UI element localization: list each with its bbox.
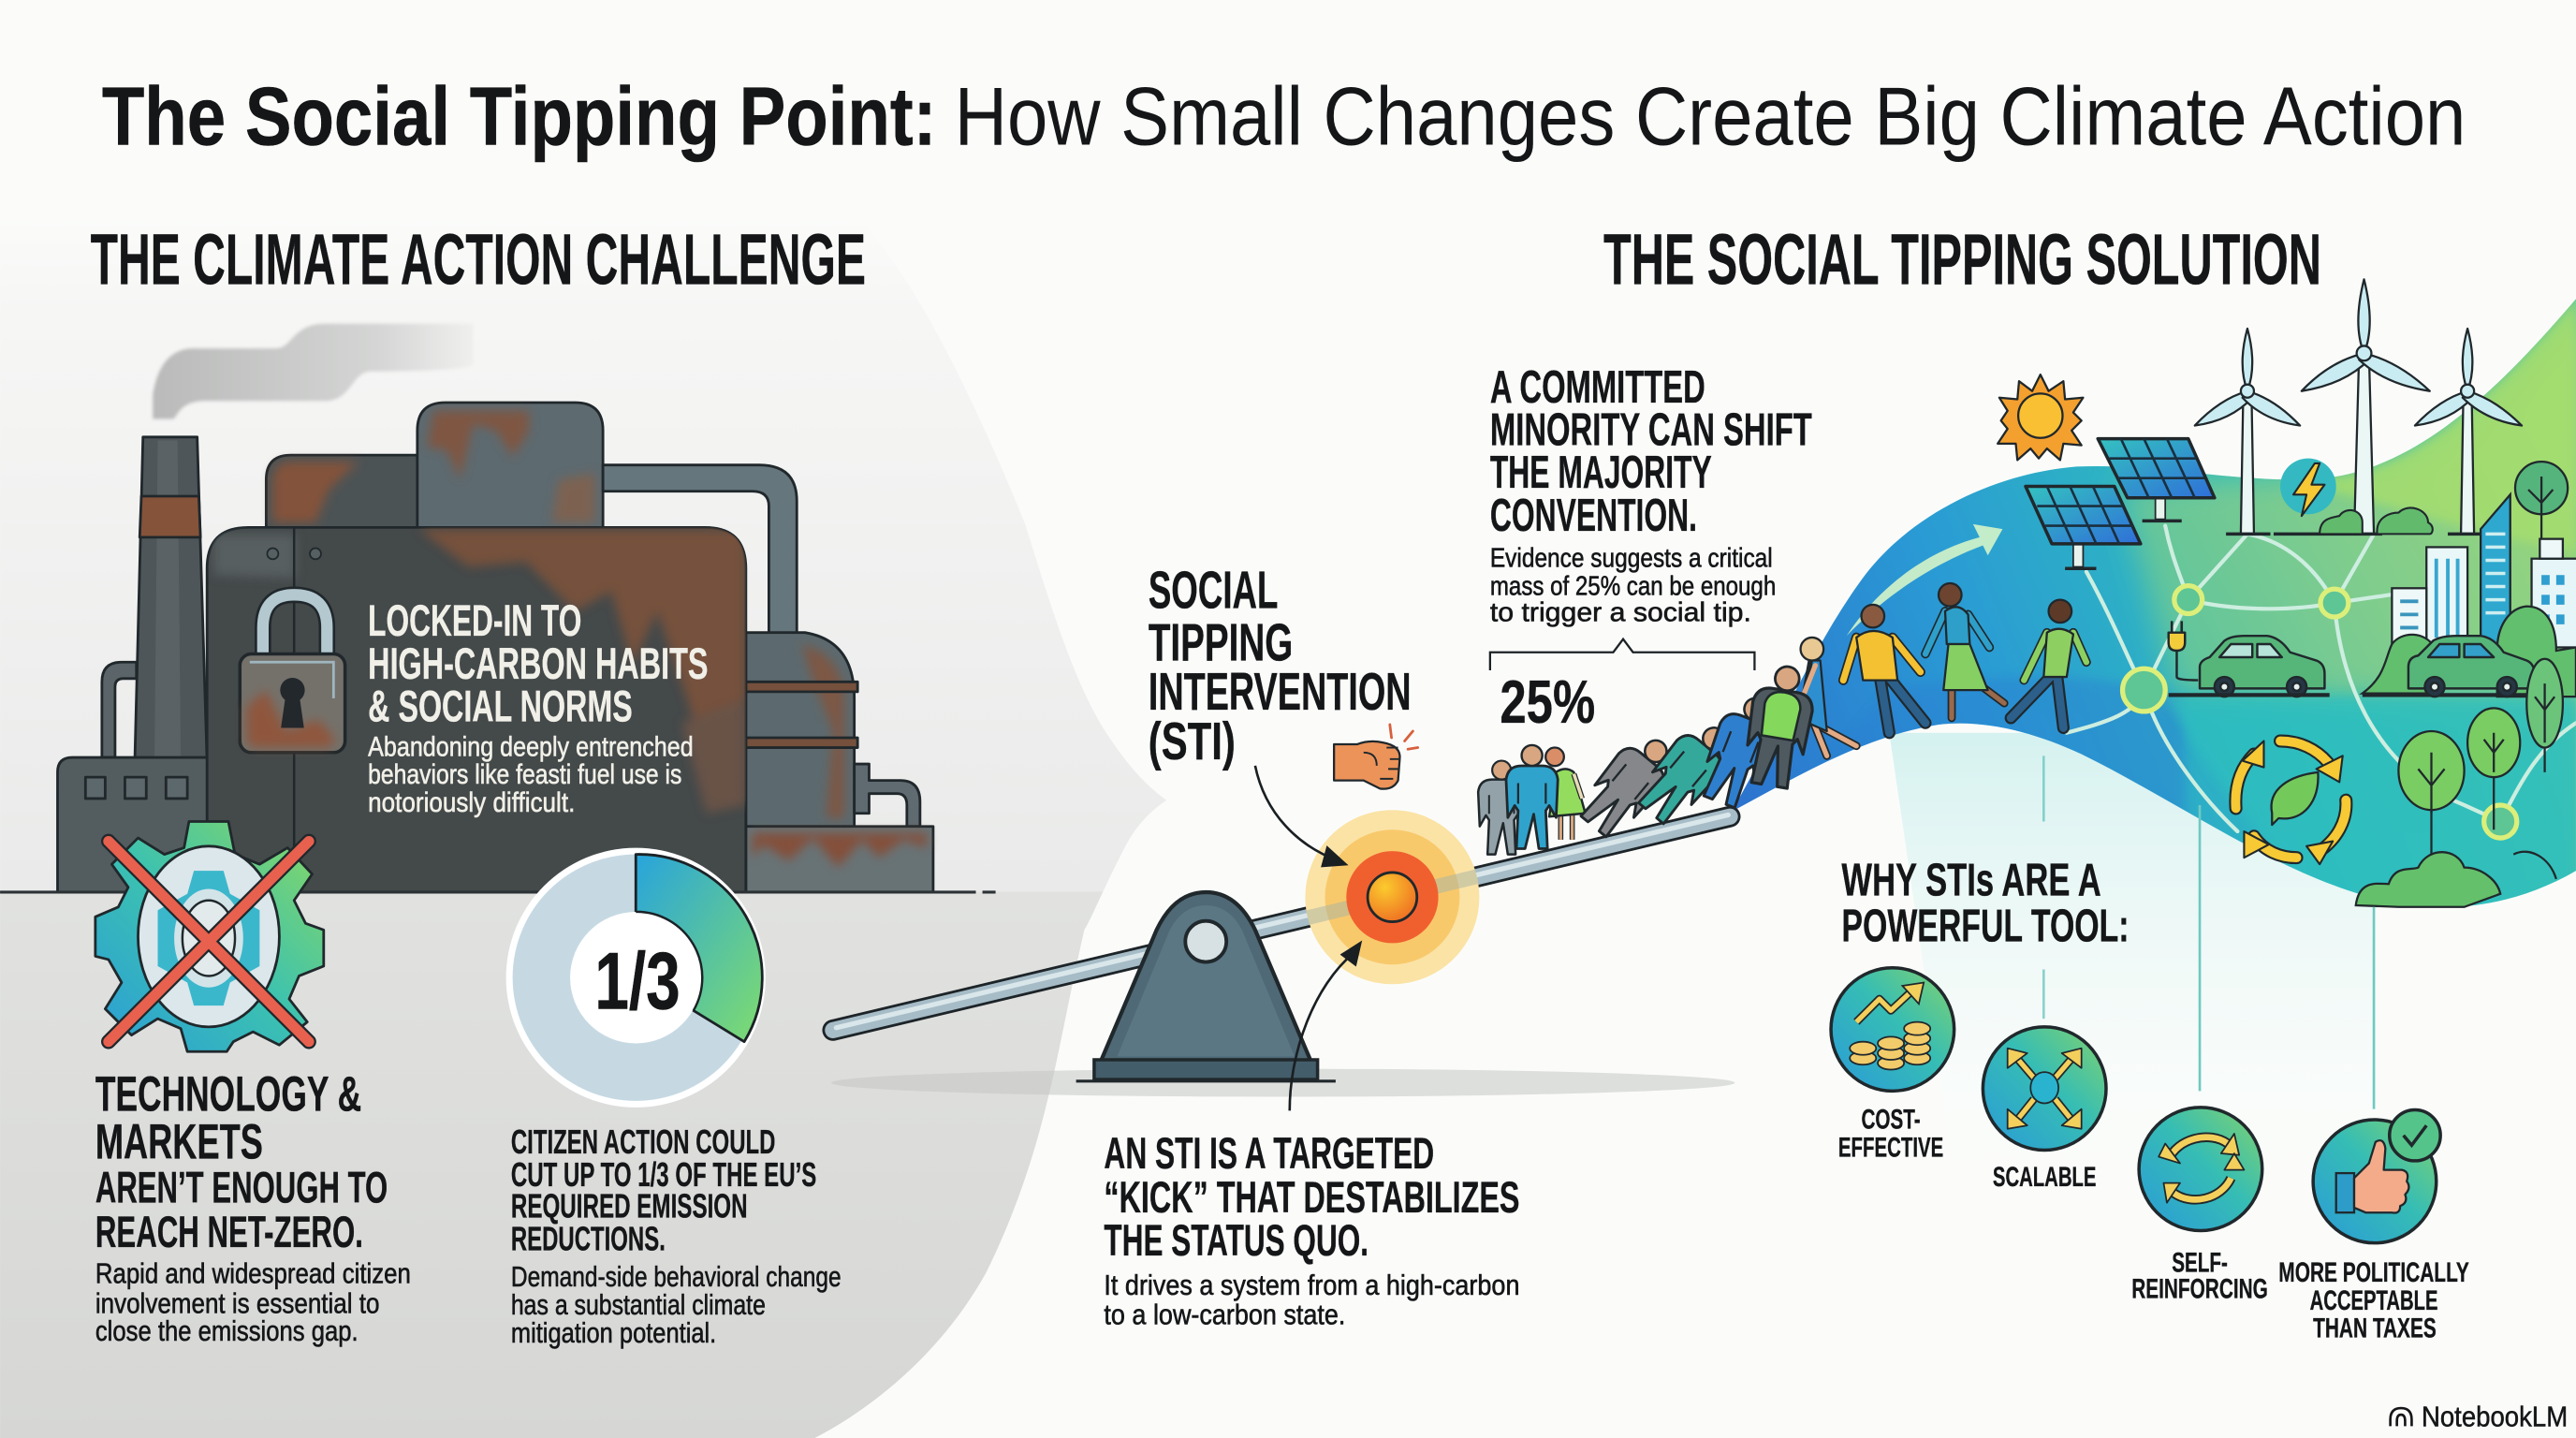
seesaw shadow xyxy=(831,1069,1734,1096)
icon: wind turbines xyxy=(2195,279,2522,534)
text block: targeted kick xyxy=(1104,1129,1519,1331)
text block: targeted kick: “KICK” THAT DESTABILIZES xyxy=(1104,1173,1519,1223)
text block: citizen action: has a substantial climate xyxy=(511,1288,766,1321)
icon: solar panels xyxy=(2026,439,2215,568)
connector lines to icons xyxy=(2043,756,2374,1109)
text block: locked-in: notoriously difficult. xyxy=(368,787,575,818)
text block: locked-in xyxy=(368,596,708,818)
icon: crossed-out gear xyxy=(95,822,324,1051)
label: politically acceptable: ACCEPTABLE xyxy=(2310,1285,2438,1316)
network nodes xyxy=(2123,586,2517,838)
arrow: label to burst xyxy=(1255,766,1345,866)
text block: citizen action: mitigation potential. xyxy=(511,1316,716,1349)
text block: targeted kick: It drives a system from a high-carbon xyxy=(1104,1269,1519,1301)
text block: committed minority: CONVENTION. xyxy=(1490,491,1697,541)
text block: citizen action: REQUIRED EMISSION xyxy=(511,1186,748,1225)
factory left building xyxy=(57,757,211,892)
icon: growth arrow xyxy=(1847,524,2002,636)
network lines xyxy=(2067,526,2576,831)
label: social tipping intervention: SOCIAL xyxy=(1149,560,1278,619)
label: social tipping intervention: (STI) xyxy=(1149,712,1236,770)
text block: technology and markets xyxy=(95,1066,411,1347)
wave: low-carbon landscape xyxy=(1732,299,2576,907)
burst: intervention point xyxy=(1305,810,1479,984)
person: grey leaning xyxy=(1573,726,1684,844)
text block: targeted kick: THE STATUS QUO. xyxy=(1104,1216,1368,1266)
text block: technology and markets: involvement is essential to xyxy=(95,1286,379,1319)
text block: citizen action xyxy=(511,1123,842,1349)
title xyxy=(102,70,2466,162)
walker: skirt xyxy=(1925,583,2004,718)
label: social tipping intervention: INTERVENTION xyxy=(1149,662,1412,721)
walker: green shirt xyxy=(2011,600,2086,727)
icon: electric cars xyxy=(2169,621,2535,697)
text block: committed minority: THE MAJORITY xyxy=(1490,448,1712,498)
icon: self-reinforcing xyxy=(2139,1108,2262,1231)
donut value: 1/3 xyxy=(594,937,681,1027)
walker: blond figure xyxy=(1799,638,1856,756)
label: scalable: SCALABLE xyxy=(1993,1162,2096,1193)
text block: technology and markets: close the emissions gap. xyxy=(95,1314,359,1347)
label: self-reinforcing: REINFORCING xyxy=(2131,1273,2268,1304)
walker: yellow shirt xyxy=(1843,605,1925,733)
bracket: 25 percent xyxy=(1490,639,1754,670)
person: grey standing xyxy=(1478,761,1525,855)
label: self-reinforcing: SELF- xyxy=(2172,1247,2228,1278)
label: politically acceptable: MORE POLITICALLY xyxy=(2278,1257,2469,1288)
bushes xyxy=(2320,507,2433,534)
person: teal leaning xyxy=(1631,712,1741,830)
text block: citizen action: REDUCTIONS. xyxy=(511,1220,666,1258)
seesaw lever xyxy=(833,814,1730,1030)
people on lever xyxy=(1478,662,1819,855)
text block: technology and markets: Rapid and widespread citizen xyxy=(95,1257,411,1290)
icon: scalable xyxy=(1983,1027,2106,1151)
text block: citizen action: CITIZEN ACTION COULD xyxy=(511,1123,775,1161)
person: blue standing xyxy=(1506,745,1558,848)
illustration: rusted factory xyxy=(0,403,996,892)
label: social tipping intervention xyxy=(1149,560,1412,770)
icon: padlock xyxy=(240,594,345,753)
panel: challenge background xyxy=(0,213,1166,1438)
label: cost-effective: COST- xyxy=(1862,1105,1921,1136)
factory main block xyxy=(207,527,746,892)
icon: lightning xyxy=(2280,459,2336,516)
icon: buildings xyxy=(2392,494,2576,647)
icon: sun xyxy=(1998,374,2083,460)
text block: committed minority: to trigger a social tip. xyxy=(1490,597,1751,627)
factory left pipe xyxy=(102,662,137,757)
text block: committed minority: MINORITY CAN SHIFT xyxy=(1490,405,1812,456)
text block: committed minority: A COMMITTED xyxy=(1490,362,1705,413)
text block: locked-in: LOCKED-IN TO xyxy=(368,596,581,646)
arrow: kick to burst xyxy=(1290,943,1360,1110)
label: self-reinforcing xyxy=(2131,1247,2268,1304)
person: blue leaning xyxy=(1693,689,1785,812)
walkers on the wave xyxy=(1799,583,2086,756)
trees behind cars xyxy=(2363,462,2576,697)
icon: cost-effective xyxy=(1831,968,1954,1091)
stat: 25 percent: 25% xyxy=(1500,668,1595,736)
title: The Social Tipping Point: xyxy=(102,70,936,162)
text block: citizen action: Demand-side behavioral change xyxy=(511,1260,842,1293)
text block: targeted kick: to a low-carbon state. xyxy=(1104,1299,1345,1331)
label: politically acceptable xyxy=(2278,1257,2469,1344)
heading: challenge: THE CLIMATE ACTION CHALLENGE xyxy=(91,220,866,301)
factory back tank xyxy=(266,403,603,527)
seesaw fulcrum xyxy=(1076,892,1336,1081)
text block: committed minority: Evidence suggests a critical xyxy=(1490,543,1773,573)
factory right base xyxy=(746,827,933,892)
factory right pipe xyxy=(603,465,797,634)
heading: why STIs xyxy=(1841,855,2130,952)
person: green dress xyxy=(1545,748,1586,840)
icon: fist xyxy=(1334,725,1418,789)
check badge xyxy=(2390,1110,2440,1161)
label: politically acceptable: THAN TAXES xyxy=(2313,1313,2437,1344)
text block: citizen action: CUT UP TO 1/3 OF THE EU’S xyxy=(511,1155,816,1194)
wave bands xyxy=(1808,246,2576,920)
icon: thumbs up xyxy=(2313,1110,2440,1243)
person: green leaning xyxy=(1740,662,1819,790)
text block: locked-in: & SOCIAL NORMS xyxy=(368,682,633,731)
label: cost-effective xyxy=(1838,1105,1943,1164)
text block: technology and markets: TECHNOLOGY & xyxy=(95,1066,361,1122)
text block: committed minority xyxy=(1490,362,1812,627)
text block: locked-in: Abandoning deeply entrenched xyxy=(368,731,694,762)
label: social tipping intervention: TIPPING xyxy=(1149,613,1293,672)
text block: targeted kick: AN STI IS A TARGETED xyxy=(1104,1129,1434,1179)
text block: technology and markets: AREN’T ENOUGH TO xyxy=(95,1164,388,1213)
factory small pipe xyxy=(855,764,920,827)
text block: locked-in: HIGH-CARBON HABITS xyxy=(368,639,708,689)
text block: technology and markets: MARKETS xyxy=(95,1114,263,1169)
wave: pale glow below xyxy=(1889,733,2374,1183)
text block: technology and markets: REACH NET-ZERO. xyxy=(95,1208,363,1257)
text block: committed minority: mass of 25% can be enough xyxy=(1490,571,1776,601)
icon: trees xyxy=(2356,659,2563,907)
factory right tank xyxy=(746,633,857,827)
ground line xyxy=(0,891,996,893)
donut chart: one third xyxy=(506,848,766,1108)
text block: locked-in: behaviors like feasti fuel use is xyxy=(368,759,681,790)
heading: why STIs: WHY STIs ARE A xyxy=(1841,855,2101,905)
icon: smoke xyxy=(153,324,474,419)
heading: why STIs: POWERFUL TOOL: xyxy=(1841,902,2130,952)
icon: recycle arrows with leaf xyxy=(2235,741,2346,864)
factory chimney xyxy=(135,437,207,762)
label: cost-effective: EFFECTIVE xyxy=(1838,1133,1943,1164)
